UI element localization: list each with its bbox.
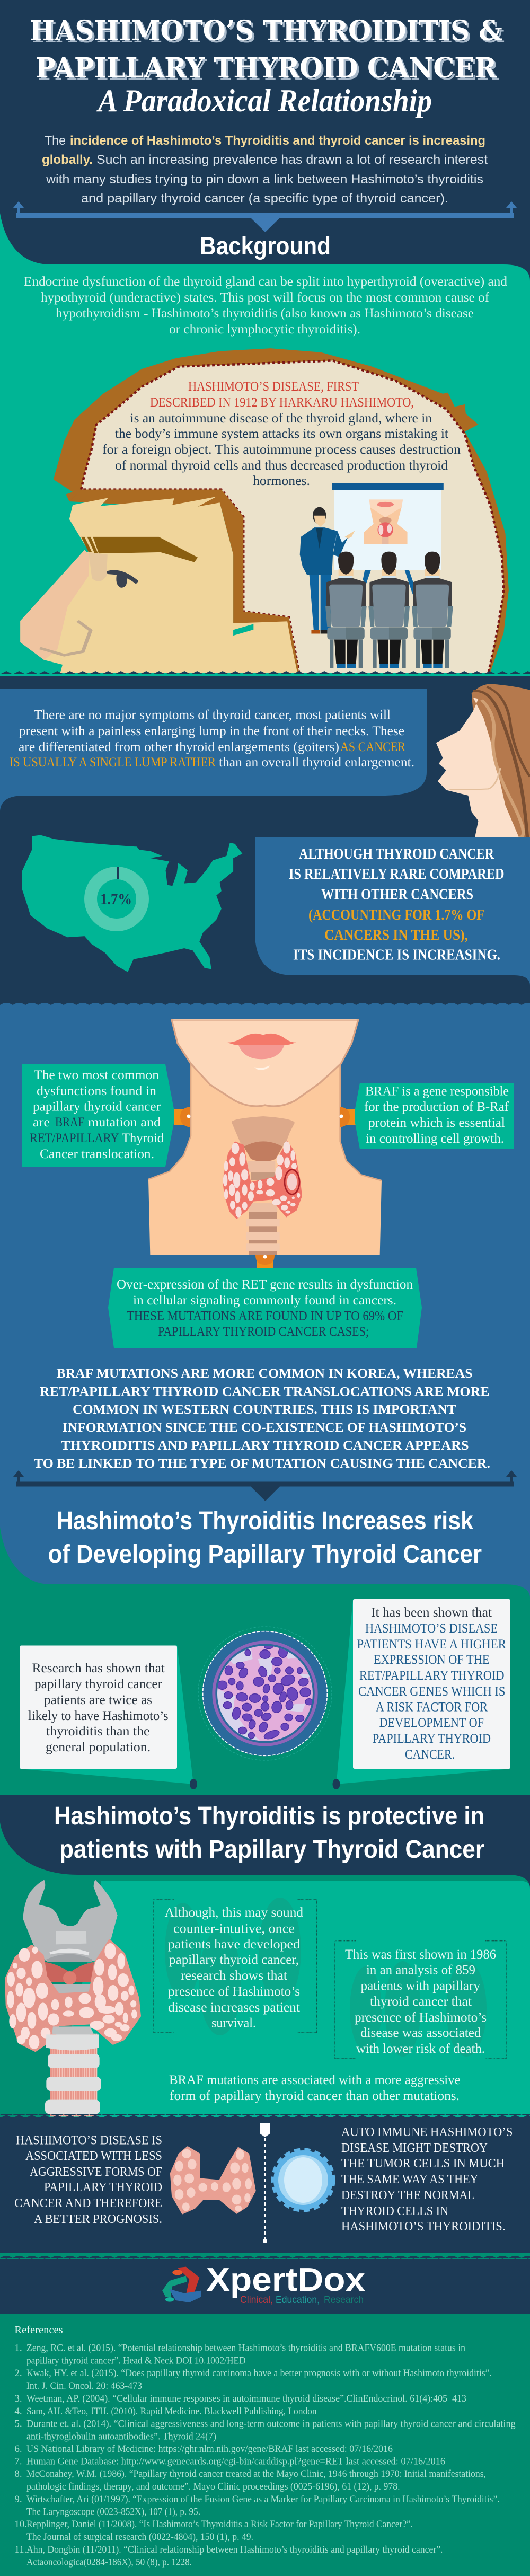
- references list: Weetman, AP. (2004). “Cellular immune responses in autoimmune thyroid disease”.ClinEndocrinol. 61(4):405–413: [26, 2393, 466, 2404]
- callout: BRAF gene: BRAF is a gene responsible: [365, 1084, 509, 1098]
- panel: symptoms: than an overall thyroid enlargement.: [219, 755, 414, 770]
- references list: 5.: [14, 2418, 22, 2430]
- references list: 10.: [14, 2519, 27, 2530]
- panel: incidence callout: ITS INCIDENCE IS INCREASING.: [293, 947, 500, 964]
- intro text block: and papillary thyroid cancer (a specific type of thyroid cancer).: [81, 191, 448, 206]
- connector: bottom callout to neck: [255, 1255, 275, 1269]
- references list: Actaoncologica(0284-186X), 50 (8), p. 1228.: [26, 2557, 192, 2568]
- references list: 4.: [14, 2406, 22, 2417]
- callout: two common dysfunctions: Thyroid: [122, 1131, 164, 1145]
- bracketed text: 1986 analysis: thyroid cancer that: [370, 1995, 472, 2009]
- background paragraph: hypothyroidism - Hashimoto’s thyroiditis (also known as Hashimoto’s disease: [56, 306, 474, 321]
- hair outer shape: [54, 348, 509, 673]
- box: research twice as likely: Research has shown that: [32, 1661, 165, 1675]
- text block: might destroy tumor cells: THYROID CELLS IN: [341, 2204, 448, 2218]
- illustration: thyroid and trachea anatomy: [6, 1880, 139, 2116]
- text block: Hashimoto's disease definition: [102, 380, 461, 488]
- heading: protective: Hashimoto’s Thyroiditis is protective in: [54, 1802, 484, 1830]
- title: PAPILLARY THYROID CANCER: [36, 52, 497, 84]
- title: HASHIMOTO’S THYROIDITIS &: [30, 15, 502, 47]
- box: higher expression of genes: EXPRESSION OF THE: [374, 1653, 490, 1667]
- callout: RET gene: PAPILLARY THYROID CANCER CASES;: [158, 1325, 369, 1339]
- seated audience: [325, 552, 453, 668]
- arrow bracket: header: [13, 201, 517, 232]
- illustration: woman in profile: [436, 684, 530, 837]
- background paragraph: or chronic lymphocytic thyroiditis).: [169, 322, 360, 337]
- logo tagline: Clinical,: [240, 2295, 273, 2306]
- text block: might destroy tumor cells: AUTO IMMUNE HASHIMOTO’S: [341, 2125, 513, 2139]
- bridge shade: [89, 552, 108, 581]
- callout: two common dysfunctions: Cancer translocation.: [40, 1147, 154, 1161]
- callout: RET gene: in cellular signaling commonly found in cancers.: [133, 1293, 396, 1308]
- hair fringe and strip: [69, 490, 299, 673]
- box: higher expression of genes: RET/PAPILLARY THYROID: [359, 1669, 505, 1683]
- text block: might destroy tumor cells: [341, 2125, 513, 2234]
- logo tagline: Education,: [276, 2295, 320, 2306]
- references list: Wirtschafter, Ari (01/1997). “Expression of the Fusion Gene as a Marker for Papillary Carcinoma in Hashimoto’s Thyroiditis”.: [26, 2494, 500, 2505]
- box: research twice as likely: papillary thyroid cancer: [34, 1677, 163, 1691]
- callout: two common dysfunctions: BRAF: [55, 1115, 84, 1130]
- panel: symptoms: There are no major symptoms of thyroid cancer, most patients will: [34, 708, 391, 722]
- text block: BRAF aggressive form: [169, 2073, 461, 2103]
- nostril line: [40, 621, 91, 655]
- panel: symptoms: present with a painless enlarging lump in the front of their necks. These: [19, 724, 404, 738]
- references list: 3.: [14, 2393, 22, 2404]
- references list: Int. J. Cin. Oncol. 20: 463-473: [26, 2380, 142, 2392]
- callout: RET gene: [108, 1268, 422, 1348]
- panel: background teal section: [0, 209, 530, 676]
- references list: 2.: [14, 2368, 22, 2379]
- logo tagline: [240, 2295, 364, 2306]
- references list: 1.: [14, 2343, 22, 2353]
- references list: 6.: [14, 2443, 22, 2455]
- box: higher expression of genes: PAPILLARY THYROID: [373, 1732, 491, 1746]
- panel: symptoms: IS USUALLY A SINGLE LUMP RATHER: [10, 755, 216, 770]
- references list: 7.: [14, 2456, 22, 2467]
- bracketed text: 1986 analysis: in an analysis of 859: [366, 1963, 475, 1977]
- bracketed text: 1986 analysis: [335, 1941, 506, 2059]
- text block: BRAF mutations geography: COMMON IN WESTERN COUNTRIES. THIS IS IMPORTANT: [73, 1402, 456, 1417]
- logo tagline: Research: [324, 2295, 364, 2306]
- text block: BRAF mutations geography: TO BE LINKED TO THE TYPE OF MUTATION CAUSING THE CANCER.: [34, 1457, 490, 1471]
- references list: 11.: [14, 2544, 26, 2555]
- dotted seam: [81, 360, 504, 673]
- subtitle: A Paradoxical Relationship: [96, 83, 432, 118]
- box: higher expression of genes: CANCER.: [405, 1748, 455, 1762]
- bracketed text: 1986 analysis: This was first shown in 1986: [345, 1947, 496, 1962]
- text block: Hashimoto's disease definition: is an autoimmune disease of the thyroid gland, where in: [130, 411, 432, 426]
- callout: BRAF gene: for the production of B-Raf: [364, 1100, 509, 1114]
- text block: BRAF mutations geography: BRAF MUTATIONS ARE MORE COMMON IN KOREA, WHEREAS: [56, 1366, 473, 1381]
- intro text block: globally.: [42, 153, 93, 167]
- intro text block: [42, 134, 488, 206]
- references list: 9.: [14, 2494, 22, 2505]
- background paragraph: [24, 275, 508, 337]
- panel: mutations blue section: [0, 1003, 530, 1797]
- pointer dots: [190, 1779, 340, 1789]
- callout: two common dysfunctions: mutation and: [88, 1115, 161, 1130]
- text block: might destroy tumor cells: DESTROY THE NORMAL: [341, 2189, 475, 2202]
- references list: anti-thyroglobulin autoantibodies”. Thyroid 24(7): [26, 2431, 216, 2442]
- sideburn mark: [233, 624, 253, 636]
- callout: two common dysfunctions: papillary thyroid cancer: [33, 1099, 161, 1114]
- map: united states with 1.7% donut: [22, 835, 242, 972]
- title: PAPILLARY THYROID CANCER: [38, 54, 499, 86]
- box: higher expression of genes: HASHIMOTO’S DISEASE: [365, 1621, 498, 1636]
- bracketed text: counter-intuitive survival: Although, this may sound: [165, 1905, 303, 1920]
- box: higher expression of genes: It has been shown that: [371, 1605, 492, 1620]
- map: united states with 1.7% donut: 1.7%: [100, 890, 132, 908]
- callout: two common dysfunctions: dysfunctions found in: [37, 1084, 157, 1098]
- nose shade: [20, 550, 90, 660]
- box: higher expression of genes: DEVELOPMENT OF: [379, 1716, 484, 1730]
- panel: incidence callout: CANCERS IN THE US),: [324, 927, 468, 943]
- references list: Zeng, RC. et al. (2015). “Potential relationship between Hashimoto’s thyroiditis and BRAFV600E mutation status in: [26, 2343, 465, 2353]
- text block: BRAF aggressive form: form of papillary thyroid cancer than other mutations.: [170, 2089, 460, 2103]
- panel: symptoms: are differentiated from other thyroid enlargements (goiters): [19, 740, 339, 754]
- bracketed text: counter-intuitive survival: presence of Hashimoto’s: [168, 1984, 300, 1999]
- references list: The Journal of surgical research (0022-4804), 150 (1), p. 49.: [26, 2531, 253, 2543]
- text block: BRAF mutations geography: INFORMATION SINCE THE CO-EXISTENCE OF HASHIMOTO’S: [63, 1421, 466, 1435]
- box: research twice as likely: thyroiditis than the: [46, 1724, 149, 1739]
- text block: less aggressive forms: AGGRESSIVE FORMS OF: [30, 2165, 162, 2179]
- callout: two common dysfunctions: are: [33, 1115, 50, 1130]
- text block: less aggressive forms: A BETTER PROGNOSIS.: [34, 2212, 162, 2226]
- heading: increases risk: [48, 1507, 482, 1568]
- text block: Hashimoto's disease definition: DESCRIBED IN 1912 BY HARKARU HASHIMOTO,: [150, 395, 414, 410]
- light teal wedges behind boxes: [20, 1599, 510, 1784]
- callout: two common dysfunctions: RET/PAPILLARY: [30, 1131, 119, 1145]
- callout: RET gene: Over-expression of the RET gene results in dysfunction: [117, 1277, 413, 1292]
- head interior cream: [81, 360, 504, 673]
- faint blobs behind text: [165, 1898, 487, 2057]
- illustration: neck with thyroid and tumour: [148, 1019, 382, 1255]
- bracketed text: counter-intuitive survival: disease increases patient: [168, 2000, 300, 2015]
- heading: protective: [54, 1802, 484, 1864]
- intro text block: Such an increasing prevalence has drawn a lot of research interest: [96, 153, 488, 167]
- references list: Human Gene Database: http://www.genecards.org/cgi-bin/carddisp.pl?gene=RET last accessed: 07/16/2016: [26, 2456, 445, 2467]
- arrow bracket: mutations: [13, 1470, 517, 1501]
- bracketed text: counter-intuitive survival: patients have developed: [168, 1937, 301, 1952]
- text block: Hashimoto's disease definition: hormones.: [253, 474, 310, 488]
- zigzag band: teal divider: [0, 2253, 530, 2259]
- text block: BRAF mutations geography: [34, 1366, 490, 1471]
- box: research twice as likely: general population.: [46, 1740, 151, 1754]
- icon: immune cell: [273, 2150, 333, 2210]
- zigzag edge: teal to navy lower: [0, 2114, 530, 2117]
- text block: Hashimoto's disease definition: of normal thyroid cells and thus decreased production thyroid: [115, 458, 448, 473]
- heading: background: Background: [200, 232, 331, 260]
- text block: BRAF mutations geography: THYROIDITIS AND PAPILLARY THYROID CANCER APPEARS: [61, 1439, 469, 1453]
- references list: Kwak, HY. et al. (2015). “Does papillary thyroid carcinoma have a better prognosis with or without Hashimoto thyroiditis”.: [26, 2368, 492, 2379]
- title: [30, 15, 505, 86]
- callout: BRAF gene: [355, 1083, 514, 1149]
- intro text block: The: [45, 134, 66, 148]
- text block: might destroy tumor cells: THE SAME WAY AS THEY: [341, 2173, 478, 2186]
- bracketed text: counter-intuitive survival: [154, 1900, 317, 2033]
- references list: McConahey, W.M. (1986). “Papillary thyroid cancer treated at the Mayo Clinic, 1946 through 1970: Initial manifestations,: [26, 2468, 486, 2480]
- text block: might destroy tumor cells: DISEASE MIGHT DESTROY: [341, 2141, 488, 2155]
- references list: 8.: [14, 2468, 22, 2480]
- text block: Hashimoto's disease definition: the body’s immune system attacks its own organs mistaking it: [115, 427, 448, 441]
- box: research twice as likely: [20, 1645, 177, 1769]
- illustration: microscope slide: [198, 1627, 332, 1760]
- panel: symptoms: [0, 689, 427, 811]
- panel: protective heading band: [0, 1795, 530, 1889]
- zigzag edge: teal to navy: [0, 671, 530, 674]
- text block: Hashimoto's disease definition: HASHIMOTO’S DISEASE, FIRST: [188, 380, 359, 394]
- text block: less aggressive forms: CANCER AND THEREFORE: [14, 2196, 162, 2210]
- logo: [162, 2262, 366, 2306]
- face: [20, 497, 297, 673]
- bracketed text: 1986 analysis: presence of Hashimoto’s: [355, 2010, 487, 2025]
- connector: left callout to neck: [174, 1107, 191, 1127]
- callout: two common dysfunctions: The two most common: [34, 1068, 160, 1082]
- background paragraph: hypothyroid (underactive) states. This post will focus on the most common cause of: [41, 290, 490, 305]
- connector: right callout to neck: [339, 1107, 356, 1127]
- presentation board: [334, 490, 441, 570]
- references list: Sam, AH. &Teo, JTH. (2010). Rapid Medicine. Blackwell Publishing, London: [26, 2406, 317, 2417]
- panel: incidence callout: (ACCOUNTING FOR 1.7% OF: [308, 907, 484, 923]
- box: research twice as likely: likely to have Hashimoto’s: [28, 1709, 169, 1723]
- icon: thyroid: [171, 2147, 255, 2214]
- references list: papillary thyroid cancer”. Head & Neck DOI 10.1002/HED: [26, 2356, 246, 2366]
- eye: [107, 570, 138, 588]
- panel: symptoms: AS CANCER: [340, 740, 405, 754]
- panel: references: [0, 2314, 530, 2576]
- text block: Hashimoto's disease definition: for a foreign object. This autoimmune process causes destruction: [102, 443, 461, 457]
- panel: header navy shape: [0, 0, 530, 281]
- text block: less aggressive forms: ASSOCIATED WITH LESS: [25, 2149, 162, 2163]
- references list: Repplinger, Daniel (11/2008). “Is Hashimoto’s Thyroiditis a Risk Factor for Papillary Thyroid Cancer?”.: [26, 2519, 413, 2530]
- references list: pathologic findings, therapy, and outcome”. Mayo Clinic proceedings (0025-6196), 61 (12), p. 978.: [26, 2481, 400, 2492]
- logo icon: [162, 2267, 201, 2302]
- panel: navy comparison: [0, 2117, 530, 2253]
- panel: protective teal section: [0, 1795, 530, 2117]
- box: higher expression of genes: [353, 1599, 510, 1769]
- text block: less aggressive forms: PAPILLARY THYROID: [44, 2181, 162, 2194]
- bracketed text: 1986 analysis: with lower risk of death.: [356, 2042, 485, 2056]
- text block: less aggressive forms: HASHIMOTO’S DISEASE IS: [16, 2134, 162, 2148]
- references list: US National Library of Medicine: https://ghr.nlm.nih.gov/gene/BRAF last accessed: 07/16/2016: [26, 2443, 393, 2455]
- illustration: head profile with presentation: [20, 348, 509, 673]
- heading: increases risk: Hashimoto’s Thyroiditis Increases risk: [57, 1507, 473, 1535]
- bracketed text: counter-intuitive survival: counter-intutive, once: [173, 1921, 295, 1936]
- callout: RET gene: THESE MUTATIONS ARE FOUND IN UP TO 69% OF: [127, 1309, 403, 1324]
- references list: [14, 2343, 516, 2568]
- text block: BRAF aggressive form: BRAF mutations are associated with a more aggressive: [169, 2073, 461, 2087]
- references list: The Laryngoscope (0023-852X), 107 (1), p. 95.: [26, 2506, 200, 2518]
- title: HASHIMOTO’S THYROIDITIS &: [32, 17, 505, 49]
- eyebrow: [93, 537, 198, 562]
- divider pin: [260, 2123, 270, 2243]
- heading: increases risk: of Developing Papillary Thyroid Cancer: [48, 1540, 482, 1568]
- logo wordmark: XpertDox: [206, 2262, 366, 2298]
- panel: incidence callout: ALTHOUGH THYROID CANCER: [299, 846, 494, 862]
- intro text block: incidence of Hashimoto’s Thyroiditis and thyroid cancer is increasing: [70, 134, 485, 148]
- bracketed text: 1986 analysis: disease was associated: [360, 2026, 481, 2040]
- callout: BRAF gene: in controlling cell growth.: [366, 1132, 504, 1146]
- text block: might destroy tumor cells: HASHIMOTO’S THYROIDITIS.: [341, 2220, 506, 2234]
- references list: Ahn, Dongbin (11/2011). “Clinical relationship between Hashimoto’s thyroiditis and papillary thyroid cancer”.: [26, 2544, 443, 2555]
- callout: BRAF gene: protein which is essential: [368, 1116, 505, 1130]
- box: higher expression of genes: A RISK FACTOR FOR: [376, 1700, 488, 1714]
- intro text block: with many studies trying to pin down a link between Hashimoto’s thyroiditis: [46, 172, 483, 187]
- bracketed text: counter-intuitive survival: research shows that: [181, 1969, 287, 1983]
- bracketed text: 1986 analysis: patients with papillary: [360, 1979, 481, 1993]
- panel: incidence callout: WITH OTHER CANCERS: [321, 886, 473, 903]
- references list: Durante et. al. (2014). “Clinical aggressiveness and long-term outcome in patients with papillary thyroid cancer and circulating: [26, 2418, 516, 2430]
- panel: incidence callout: [255, 837, 530, 986]
- text block: less aggressive forms: [14, 2134, 162, 2226]
- heading: protective: patients with Papillary Thyroid Cancer: [59, 1836, 484, 1864]
- text block: might destroy tumor cells: THE TUMOR CELLS IN MUCH: [341, 2157, 505, 2171]
- callout: two common dysfunctions: [22, 1064, 174, 1167]
- bracketed text: counter-intuitive survival: papillary thyroid cancer,: [169, 1953, 299, 1967]
- references heading: References: [14, 2324, 63, 2336]
- box: higher expression of genes: PATIENTS HAVE A HIGHER: [357, 1637, 506, 1652]
- presenter: [313, 507, 326, 524]
- box: research twice as likely: patients are twice as: [44, 1693, 152, 1707]
- bracketed text: counter-intuitive survival: survival.: [211, 2016, 256, 2030]
- text block: BRAF mutations geography: RET/PAPILLARY THYROID CANCER TRANSLOCATIONS ARE MORE: [40, 1384, 490, 1399]
- box: higher expression of genes: CANCER GENES WHICH IS: [358, 1684, 506, 1699]
- background paragraph: Endocrine dysfunction of the thyroid gland can be split into hyperthyroid (overactive) and: [24, 275, 508, 289]
